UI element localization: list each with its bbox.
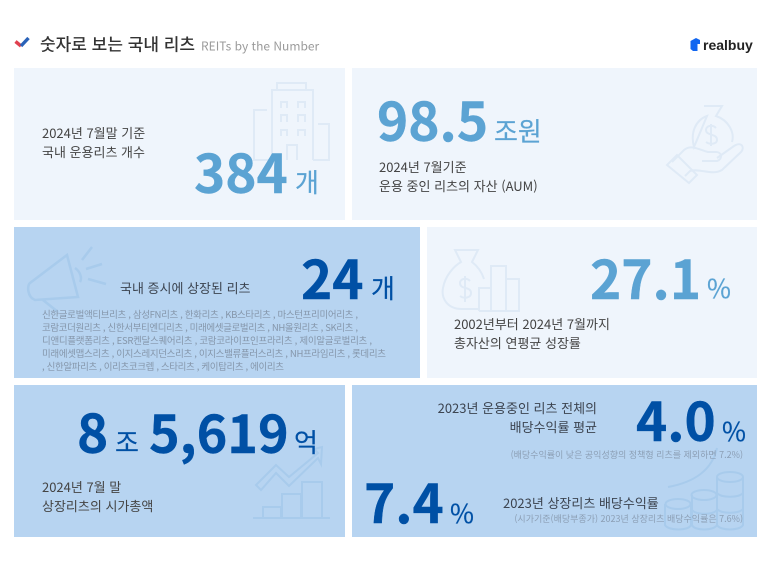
text: AUM label: 운용 중인 리츠의 자산 (AUM) (379, 176, 538, 195)
number: 98.5: 98.5 (377, 81, 488, 157)
header (16, 30, 320, 56)
text: listed label: 국내 증시에 상장된 리츠 (120, 278, 251, 297)
number: 7.4: 7.4 (364, 463, 444, 539)
number: 5,619: 5,619 (149, 393, 289, 468)
icon: coin stacks (665, 448, 743, 530)
number: 384: 384 (194, 133, 288, 209)
text: REIT count label: 2024년 7월말 기준 (42, 123, 145, 142)
text: average yield note: (배당수익률이 낮은 공익성향의 정책형 리츠를 제외하면 7.2%) (511, 448, 743, 461)
unit: % (707, 269, 731, 306)
logo: realbuy: realbuy (703, 37, 753, 53)
unit: % (450, 494, 474, 531)
text: listed REIT names: 디앤디플랫폼리츠 , ESR켄달스퀘어리츠 , 코람코라이프인프라리츠 , 제이알글로벌리츠 , (42, 333, 372, 347)
text: AUM label (379, 157, 538, 195)
icon: buildings (254, 83, 329, 160)
text: average yield label (438, 398, 597, 436)
unit: % (722, 412, 746, 449)
panel: market cap (14, 385, 345, 537)
unit: jo: 조 (115, 423, 139, 460)
panel: dividend yield (352, 381, 757, 539)
panel: listed REITs (14, 227, 420, 378)
icon: growth chart (253, 447, 330, 518)
icon: money bag in hand (667, 106, 743, 183)
text: listed yield note: (시가기준(배당부종가) 2023년 상장리츠 배당수익률은 7.6%) (514, 512, 743, 525)
text: average yield label: 배당수익률 평균 (510, 417, 597, 436)
number: 8: 8 (77, 393, 108, 469)
unit: eok: 억 (294, 423, 318, 460)
text: listed REIT names: 코람코더원리츠 , 신한서부티엔디리츠 , 미래에셋글로벌리츠 , NH올원리츠 , SK리츠 , (42, 320, 358, 334)
text: market cap label (42, 477, 153, 515)
text: growth label: 총자산의 연평균 성장률 (454, 333, 581, 352)
icon: megaphone (28, 247, 106, 312)
panel: growth rate (427, 227, 757, 378)
text: average yield label: 2023년 운용중인 리츠 전체의 (438, 398, 597, 417)
panel: REIT count (14, 68, 345, 220)
text: REIT count label: 국내 운용리츠 개수 (42, 142, 145, 161)
subtitle: REITs by the Number (201, 38, 320, 54)
text: market cap label: 2024년 7월 말 (42, 477, 121, 496)
icon: check mark (16, 38, 28, 46)
number: 24: 24 (301, 239, 364, 315)
text: listed REIT names: 미래에셋맵스리츠 , 이지스레지던스리츠 , 이지스밸류플러스리츠 , NH프라임리츠 , 롯데리츠 (42, 346, 386, 360)
title: 숫자로 보는 국내 리츠 (40, 30, 195, 56)
text: listed REIT names: , 신한알파리츠 , 이리츠코크렙 , 스타리츠 , 케이탑리츠 , 에이리츠 (42, 359, 284, 373)
text: listed REIT names (42, 307, 386, 373)
unit: 개 (295, 163, 319, 200)
unit: 개 (371, 269, 395, 306)
text: market cap label: 상장리츠의 시가총액 (42, 496, 153, 515)
text: REIT count label (42, 123, 145, 161)
unit: 조원 (494, 112, 542, 149)
text: listed yield label: 2023년 상장리츠 배당수익률 (503, 493, 659, 512)
text: growth label (454, 314, 610, 352)
text: AUM label: 2024년 7월기준 (379, 157, 467, 176)
icon: money bag and bars (443, 250, 519, 311)
number: 27.1: 27.1 (590, 239, 701, 315)
text: growth label: 2002년부터 2024년 7월까지 (454, 314, 610, 333)
text: listed REIT names: 신한글로벌액티브리츠 , 삼성FN리츠 , 한화리츠 , KB스타리츠 , 마스턴프리미어리츠 , (42, 307, 358, 321)
panel: AUM (352, 68, 757, 220)
number: 4.0: 4.0 (636, 381, 716, 457)
